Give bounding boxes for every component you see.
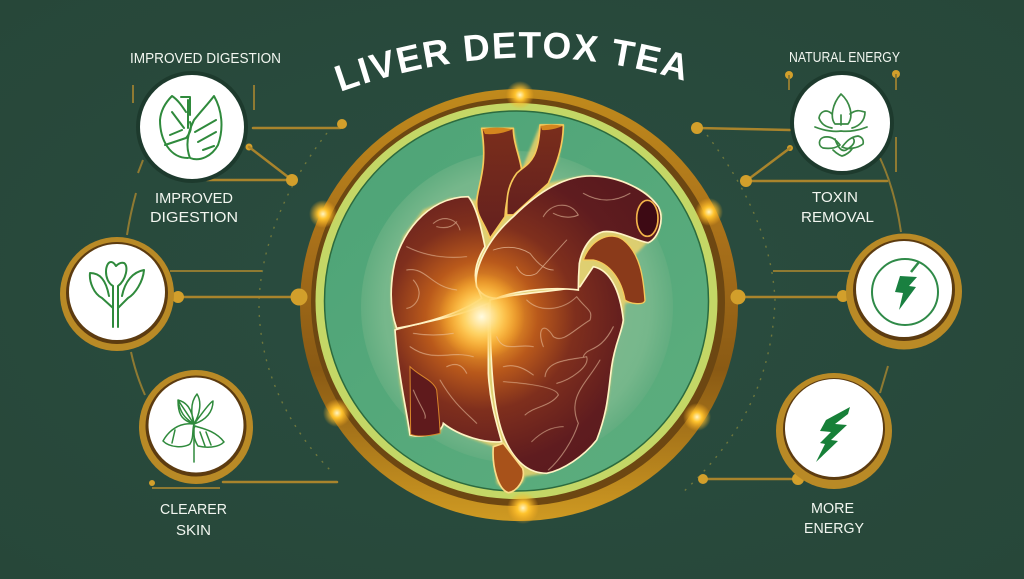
- label: more: MORE: [811, 500, 854, 517]
- lower left lobe: [395, 303, 502, 442]
- label: improved digestion top: IMPROVED DIGESTION: [130, 50, 281, 67]
- aorta opening: [637, 200, 658, 236]
- icon: lotus (top right): [790, 71, 894, 175]
- label: energy: ENERGY: [804, 520, 864, 537]
- outer glow: [392, 125, 662, 493]
- labels: [130, 49, 900, 539]
- gold ring: [300, 89, 738, 521]
- label: toxin: TOXIN: [812, 189, 858, 206]
- connector network: [127, 70, 901, 495]
- green disc: [324, 111, 708, 491]
- upper right lobe: [476, 176, 661, 298]
- dark inner lobe: [410, 367, 440, 436]
- inner disc: [361, 151, 673, 463]
- ring lights: [290, 81, 746, 524]
- label: clearer: CLEARER: [160, 501, 227, 518]
- central glow: [438, 273, 525, 360]
- aortic arch: [583, 236, 645, 304]
- title: LIVER DETOX TEA: [334, 32, 684, 92]
- icon: lightning in circle (middle right): [846, 234, 962, 350]
- label: natural energy: NATURAL ENERGY: [789, 49, 900, 66]
- label: improved digestion lower: IMPROVED: [155, 190, 233, 207]
- surface veins: [407, 193, 630, 470]
- right lobe: [490, 267, 623, 473]
- central medallion: [290, 81, 746, 524]
- upper left lobe: [391, 197, 485, 328]
- bottom stub: [493, 443, 523, 493]
- label: skin: SKIN: [176, 522, 211, 539]
- lime ring: [316, 103, 718, 499]
- icon: improved digestion (top left): [136, 71, 248, 183]
- liver illustration: [391, 125, 662, 493]
- icon: leaves (bottom left): [139, 370, 253, 484]
- icon: lightning bolt (bottom right): [776, 373, 892, 489]
- vessels: [477, 125, 563, 238]
- label: digestion: DIGESTION: [150, 209, 238, 226]
- icon: sprout (middle left): [60, 237, 174, 351]
- label: removal: REMOVAL: [801, 209, 874, 226]
